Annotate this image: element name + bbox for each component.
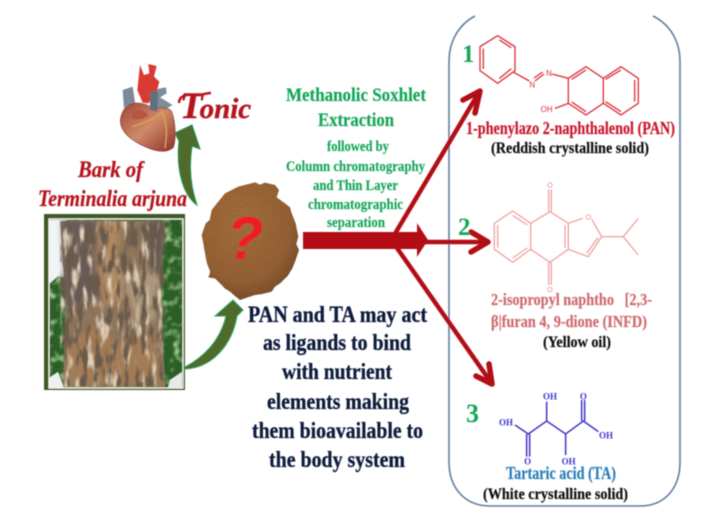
heading: extraction [286, 85, 427, 131]
text: separation methods: followed by [327, 139, 389, 155]
icon: red question mark: ? [227, 205, 263, 272]
molecule: INFD structure: O [585, 212, 591, 221]
caption: PAN: (Reddish crystalline solid) [491, 140, 649, 157]
molecule: tartaric acid structure: OH [543, 391, 557, 401]
caption: tartaric acid: (White crystalline solid) [483, 486, 628, 503]
molecule: INFD structure [494, 181, 638, 294]
text: separation methods [286, 139, 425, 231]
caption: tartaric acid [483, 463, 628, 503]
text: separation methods: and Thin Layer [313, 178, 398, 194]
arrow: bark to powder [185, 300, 243, 369]
image: brown powder pile [202, 182, 299, 300]
panel: compounds outline [449, 16, 680, 506]
text: ligand note: as ligands to bind [263, 330, 411, 355]
photo: tree bark [44, 214, 185, 390]
caption: INFD [491, 290, 652, 351]
molecule: tartaric acid structure: O [524, 456, 531, 466]
caption: INFD: 2-isopropyl naphtho [2,3- [491, 290, 652, 309]
caption: INFD: β|furan 4, 9-dione (INFD) [491, 312, 647, 331]
caption: PAN [466, 118, 675, 157]
label: number 1: 1 [462, 41, 474, 68]
text: ligand note: elements making [267, 389, 409, 414]
molecule: tartaric acid structure: OH [599, 431, 613, 441]
text: separation methods: separation [327, 215, 386, 231]
molecule: tartaric acid structure: OH [499, 417, 513, 427]
text: ligand note [248, 302, 427, 472]
molecule: INFD structure: O [547, 181, 553, 190]
text: ligand note: them bioavailable to [252, 418, 423, 443]
molecule: tartaric acid structure: O [580, 391, 587, 401]
icon: human heart [120, 64, 175, 151]
text: separation methods: chromatographic [308, 197, 403, 213]
molecule: tartaric acid structure [499, 391, 613, 466]
label: Bark of Terminalia arjuna: Bark of [77, 157, 145, 182]
molecule: tartaric acid structure: OH [562, 456, 576, 466]
text: ligand note: the body system [269, 447, 405, 472]
label: Bark of Terminalia arjuna: Terminalia arjuna [38, 186, 187, 211]
molecule: PAN structure: N [546, 69, 552, 78]
caption: tartaric acid: Tartaric acid (TA) [506, 463, 616, 484]
molecule: PAN structure: N [529, 80, 535, 89]
text: ligand note: with nutrient [282, 359, 392, 384]
molecule: INFD structure: O [547, 285, 553, 294]
label: Bark of Terminalia arjuna [38, 157, 187, 211]
arrow: powder to heart [175, 125, 200, 205]
text: ligand note: PAN and TA may act [248, 302, 427, 327]
label: number 3: 3 [466, 399, 479, 428]
heading: extraction: Methanolic Soxhlet [286, 85, 427, 106]
molecule: PAN structure [480, 36, 638, 115]
label: number 2: 2 [458, 214, 470, 241]
title: Tonic: Tonic [180, 86, 251, 127]
arrows: extraction split [303, 91, 492, 384]
caption: INFD: (Yellow oil) [543, 334, 611, 351]
molecule: PAN structure: OH [541, 105, 553, 114]
text: separation methods: Column chromatography [286, 159, 425, 175]
heading: extraction: Extraction [318, 110, 394, 131]
